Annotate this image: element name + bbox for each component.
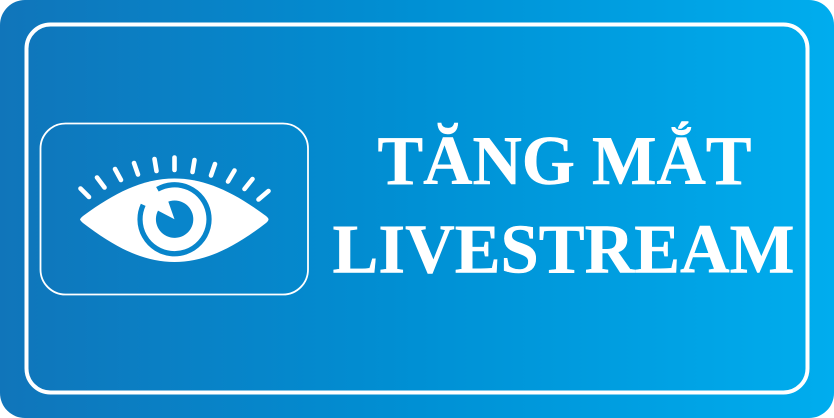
heading line 2: LIVESTREAM bbox=[332, 212, 794, 288]
icon: eye shape bbox=[80, 178, 268, 262]
icon: iris ring bbox=[140, 185, 209, 254]
icon: eye bbox=[80, 158, 268, 262]
icon: pupil bbox=[156, 201, 193, 238]
heading line 1: TĂNG MẮT bbox=[378, 121, 752, 200]
panel: icon frame bbox=[40, 124, 308, 294]
icon: eyelashes bbox=[80, 158, 268, 200]
